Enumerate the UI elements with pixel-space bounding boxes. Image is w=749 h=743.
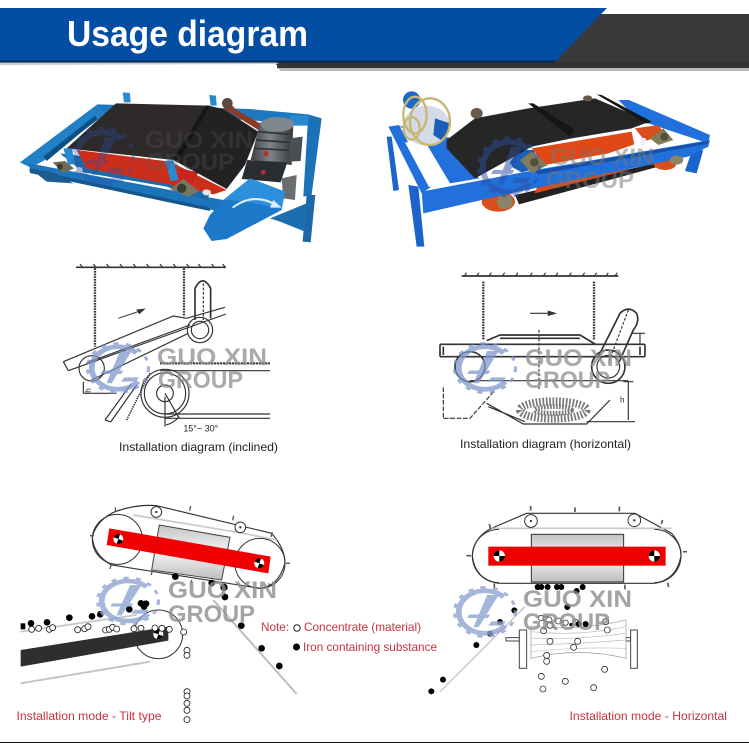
- motor cover: [203, 178, 285, 241]
- frame rails and legs: [387, 100, 710, 247]
- drum and underside: [60, 153, 210, 200]
- watermark: tilt schematic: GUO XIN: [168, 577, 277, 604]
- belt and magnet: [466, 506, 687, 589]
- title: Usage diagram: [67, 13, 308, 54]
- watermark: tilt schematic: [91, 573, 277, 629]
- bearings: [53, 161, 74, 173]
- caption: tilt type: Installation mode - Tilt type: [16, 709, 162, 723]
- watermark: inclined diagram: [81, 338, 267, 398]
- watermark: photo 2: [472, 132, 654, 202]
- bearings: [520, 152, 548, 173]
- lower belt and drums: [515, 163, 662, 204]
- front rail: [422, 140, 710, 213]
- watermark: horizontal schematic: GUO XIN: [523, 586, 632, 613]
- concentrate particles: [538, 615, 610, 692]
- watermark: photo 2: GROUP: [546, 167, 634, 194]
- line drawing: inclined installation: h: [84, 388, 93, 393]
- posts: [123, 92, 131, 102]
- watermark: photo 1: GROUP: [146, 149, 234, 176]
- concentrate particles: [29, 624, 190, 723]
- motor with cable: [403, 91, 420, 109]
- watermark: photo 1: GUO XIN: [145, 127, 253, 154]
- legend note: Iron containing substance: [303, 640, 437, 654]
- motor: [251, 122, 293, 165]
- photo: magnetic separator with frame legs: [387, 91, 710, 247]
- caption: horizontal type: Installation mode - Horizontal: [570, 709, 727, 723]
- belt: [67, 103, 208, 160]
- watermark: horizontal schematic: [448, 582, 632, 642]
- legend note: [261, 620, 437, 654]
- caption: inclined: Installation diagram (inclined): [119, 440, 278, 454]
- belt: [447, 98, 650, 178]
- watermark: horizontal diagram: GROUP: [525, 367, 610, 394]
- photo: magnetic separator with motor: [20, 92, 322, 242]
- legend note: Note:: [261, 620, 289, 634]
- line drawing: inclined installation: [63, 264, 270, 434]
- schematic: tilt type: [21, 505, 297, 723]
- caption: horizontal: Installation diagram (horizontal): [460, 437, 631, 451]
- belt and magnet: [90, 505, 290, 588]
- schematic: horizontal type: [428, 506, 687, 694]
- conveyor: [21, 600, 297, 694]
- drum: [506, 620, 637, 668]
- chute: [440, 607, 525, 692]
- watermark: horizontal schematic: GROUP: [523, 609, 610, 636]
- watermark: inclined diagram: GUO XIN: [157, 344, 267, 371]
- watermark: photo 1: [66, 122, 253, 192]
- line drawing: inclined installation: 15°~ 30°: [183, 424, 219, 434]
- iron particles: [21, 573, 283, 669]
- watermark: tilt schematic: GROUP: [168, 601, 255, 628]
- watermark: horizontal diagram: GUO XIN: [525, 345, 632, 372]
- legend note: Concentrate (material): [304, 620, 421, 634]
- watermark: horizontal diagram: [448, 338, 632, 398]
- frame rails: [20, 104, 322, 242]
- watermark: photo 2: GUO XIN: [550, 144, 654, 171]
- line drawing: horizontal installation: [440, 273, 645, 424]
- watermark: inclined diagram: GROUP: [158, 367, 243, 394]
- iron particles: [428, 584, 589, 694]
- header banner: [0, 8, 749, 71]
- line drawing: horizontal installation: h: [620, 396, 624, 405]
